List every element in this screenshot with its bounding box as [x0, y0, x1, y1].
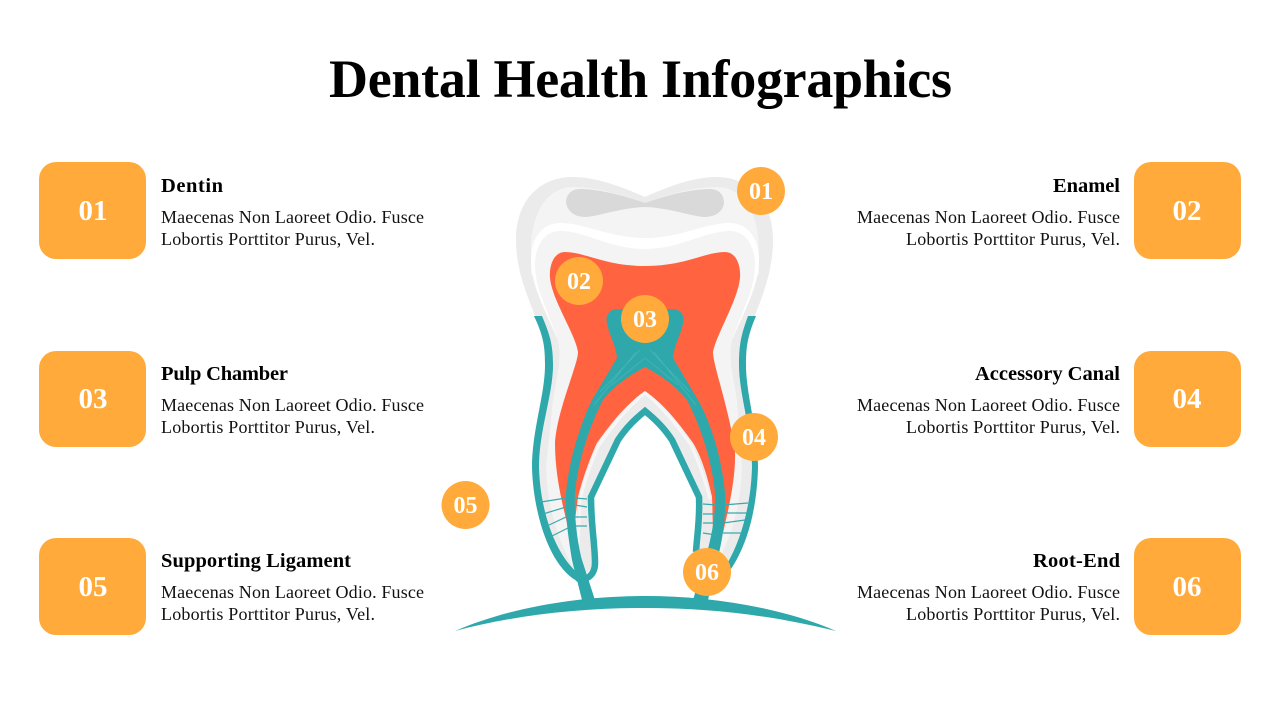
- panel: 06 Root-End: [857, 538, 1241, 635]
- panel: 05 Supporting Ligament: [39, 538, 424, 635]
- dentin body: [535, 231, 755, 565]
- heading: Supporting Ligament: Supporting Ligament: [161, 550, 351, 572]
- description: Maecenas Non Laoreet Odio. Fusce: [857, 395, 1120, 415]
- marker 04: [730, 413, 778, 461]
- pulp chamber: [550, 252, 740, 533]
- description: Lobortis Porttitor Purus, Vel.: [161, 229, 375, 249]
- nerve fibres: [594, 350, 696, 405]
- description: [857, 207, 1120, 249]
- badge 03: 03: [78, 383, 108, 415]
- marker 05: [442, 481, 490, 529]
- badge 03: [39, 351, 146, 447]
- badge 04: [1134, 351, 1241, 447]
- badge 02: [1134, 162, 1241, 259]
- description: Maecenas Non Laoreet Odio. Fusce: [857, 582, 1120, 602]
- title: Dental Health Infographics: [329, 49, 952, 109]
- enamel inner crown: [531, 187, 759, 275]
- pulp canals: [566, 309, 725, 600]
- description: Maecenas Non Laoreet Odio. Fusce: [161, 207, 424, 227]
- inner root dentin: [575, 391, 713, 575]
- white dentin band: [531, 223, 759, 338]
- tooth diagram: [455, 177, 836, 631]
- ligament fibres left: [541, 498, 587, 537]
- periodontal outer line left: [532, 316, 579, 581]
- description: Maecenas Non Laoreet Odio. Fusce: [161, 582, 424, 602]
- heading: Pulp Chamber: Pulp Chamber: [161, 363, 288, 385]
- ground gum line: [455, 596, 836, 631]
- panel: 02 Enamel: [857, 162, 1241, 259]
- badge 04: 04: [1172, 383, 1202, 415]
- description: [161, 395, 424, 437]
- panel: 04 Accessory Canal: [857, 351, 1241, 447]
- periodontal outer line right: [727, 316, 758, 569]
- heading: Root-End: Root-End: [1033, 550, 1121, 572]
- panel: 01 Dentin: [39, 162, 424, 259]
- badge 05: 05: [78, 571, 108, 603]
- ligament fibres right: [703, 503, 748, 535]
- description: Lobortis Porttitor Purus, Vel.: [161, 604, 375, 624]
- description: [161, 207, 424, 249]
- description: [857, 582, 1120, 624]
- enamel outer shell: [516, 177, 773, 579]
- heading: Dentin: Dentin: [161, 175, 224, 197]
- marker 01: 01: [749, 179, 773, 205]
- badge 01: [39, 162, 146, 259]
- marker 06: [683, 548, 731, 596]
- marker 02: [555, 257, 603, 305]
- badge 06: [1134, 538, 1241, 635]
- inner arch line: [577, 411, 699, 579]
- description: Lobortis Porttitor Purus, Vel.: [906, 229, 1120, 249]
- occlusal groove shading: [566, 189, 724, 217]
- description: [857, 395, 1120, 437]
- description: Lobortis Porttitor Purus, Vel.: [906, 604, 1120, 624]
- marker 02: 02: [567, 269, 591, 295]
- badge 02: 02: [1172, 195, 1202, 227]
- heading: Enamel: Enamel: [1053, 175, 1120, 197]
- description: Lobortis Porttitor Purus, Vel.: [161, 417, 375, 437]
- marker 05: 05: [454, 493, 478, 519]
- badge 06: 06: [1172, 571, 1202, 603]
- description: [161, 582, 424, 624]
- badge 05: [39, 538, 146, 635]
- marker 03: [621, 295, 669, 343]
- marker 01: [737, 167, 785, 215]
- heading: Accessory Canal: Accessory Canal: [975, 363, 1120, 385]
- description: Maecenas Non Laoreet Odio. Fusce: [857, 207, 1120, 227]
- description: Lobortis Porttitor Purus, Vel.: [906, 417, 1120, 437]
- description: Maecenas Non Laoreet Odio. Fusce: [161, 395, 424, 415]
- marker 04: 04: [742, 425, 766, 451]
- panel: 03 Pulp Chamber: [39, 351, 424, 447]
- inner root highlight: [578, 393, 710, 545]
- badge 01: 01: [78, 195, 108, 227]
- marker 03: 03: [633, 307, 657, 333]
- marker 06: 06: [695, 560, 719, 586]
